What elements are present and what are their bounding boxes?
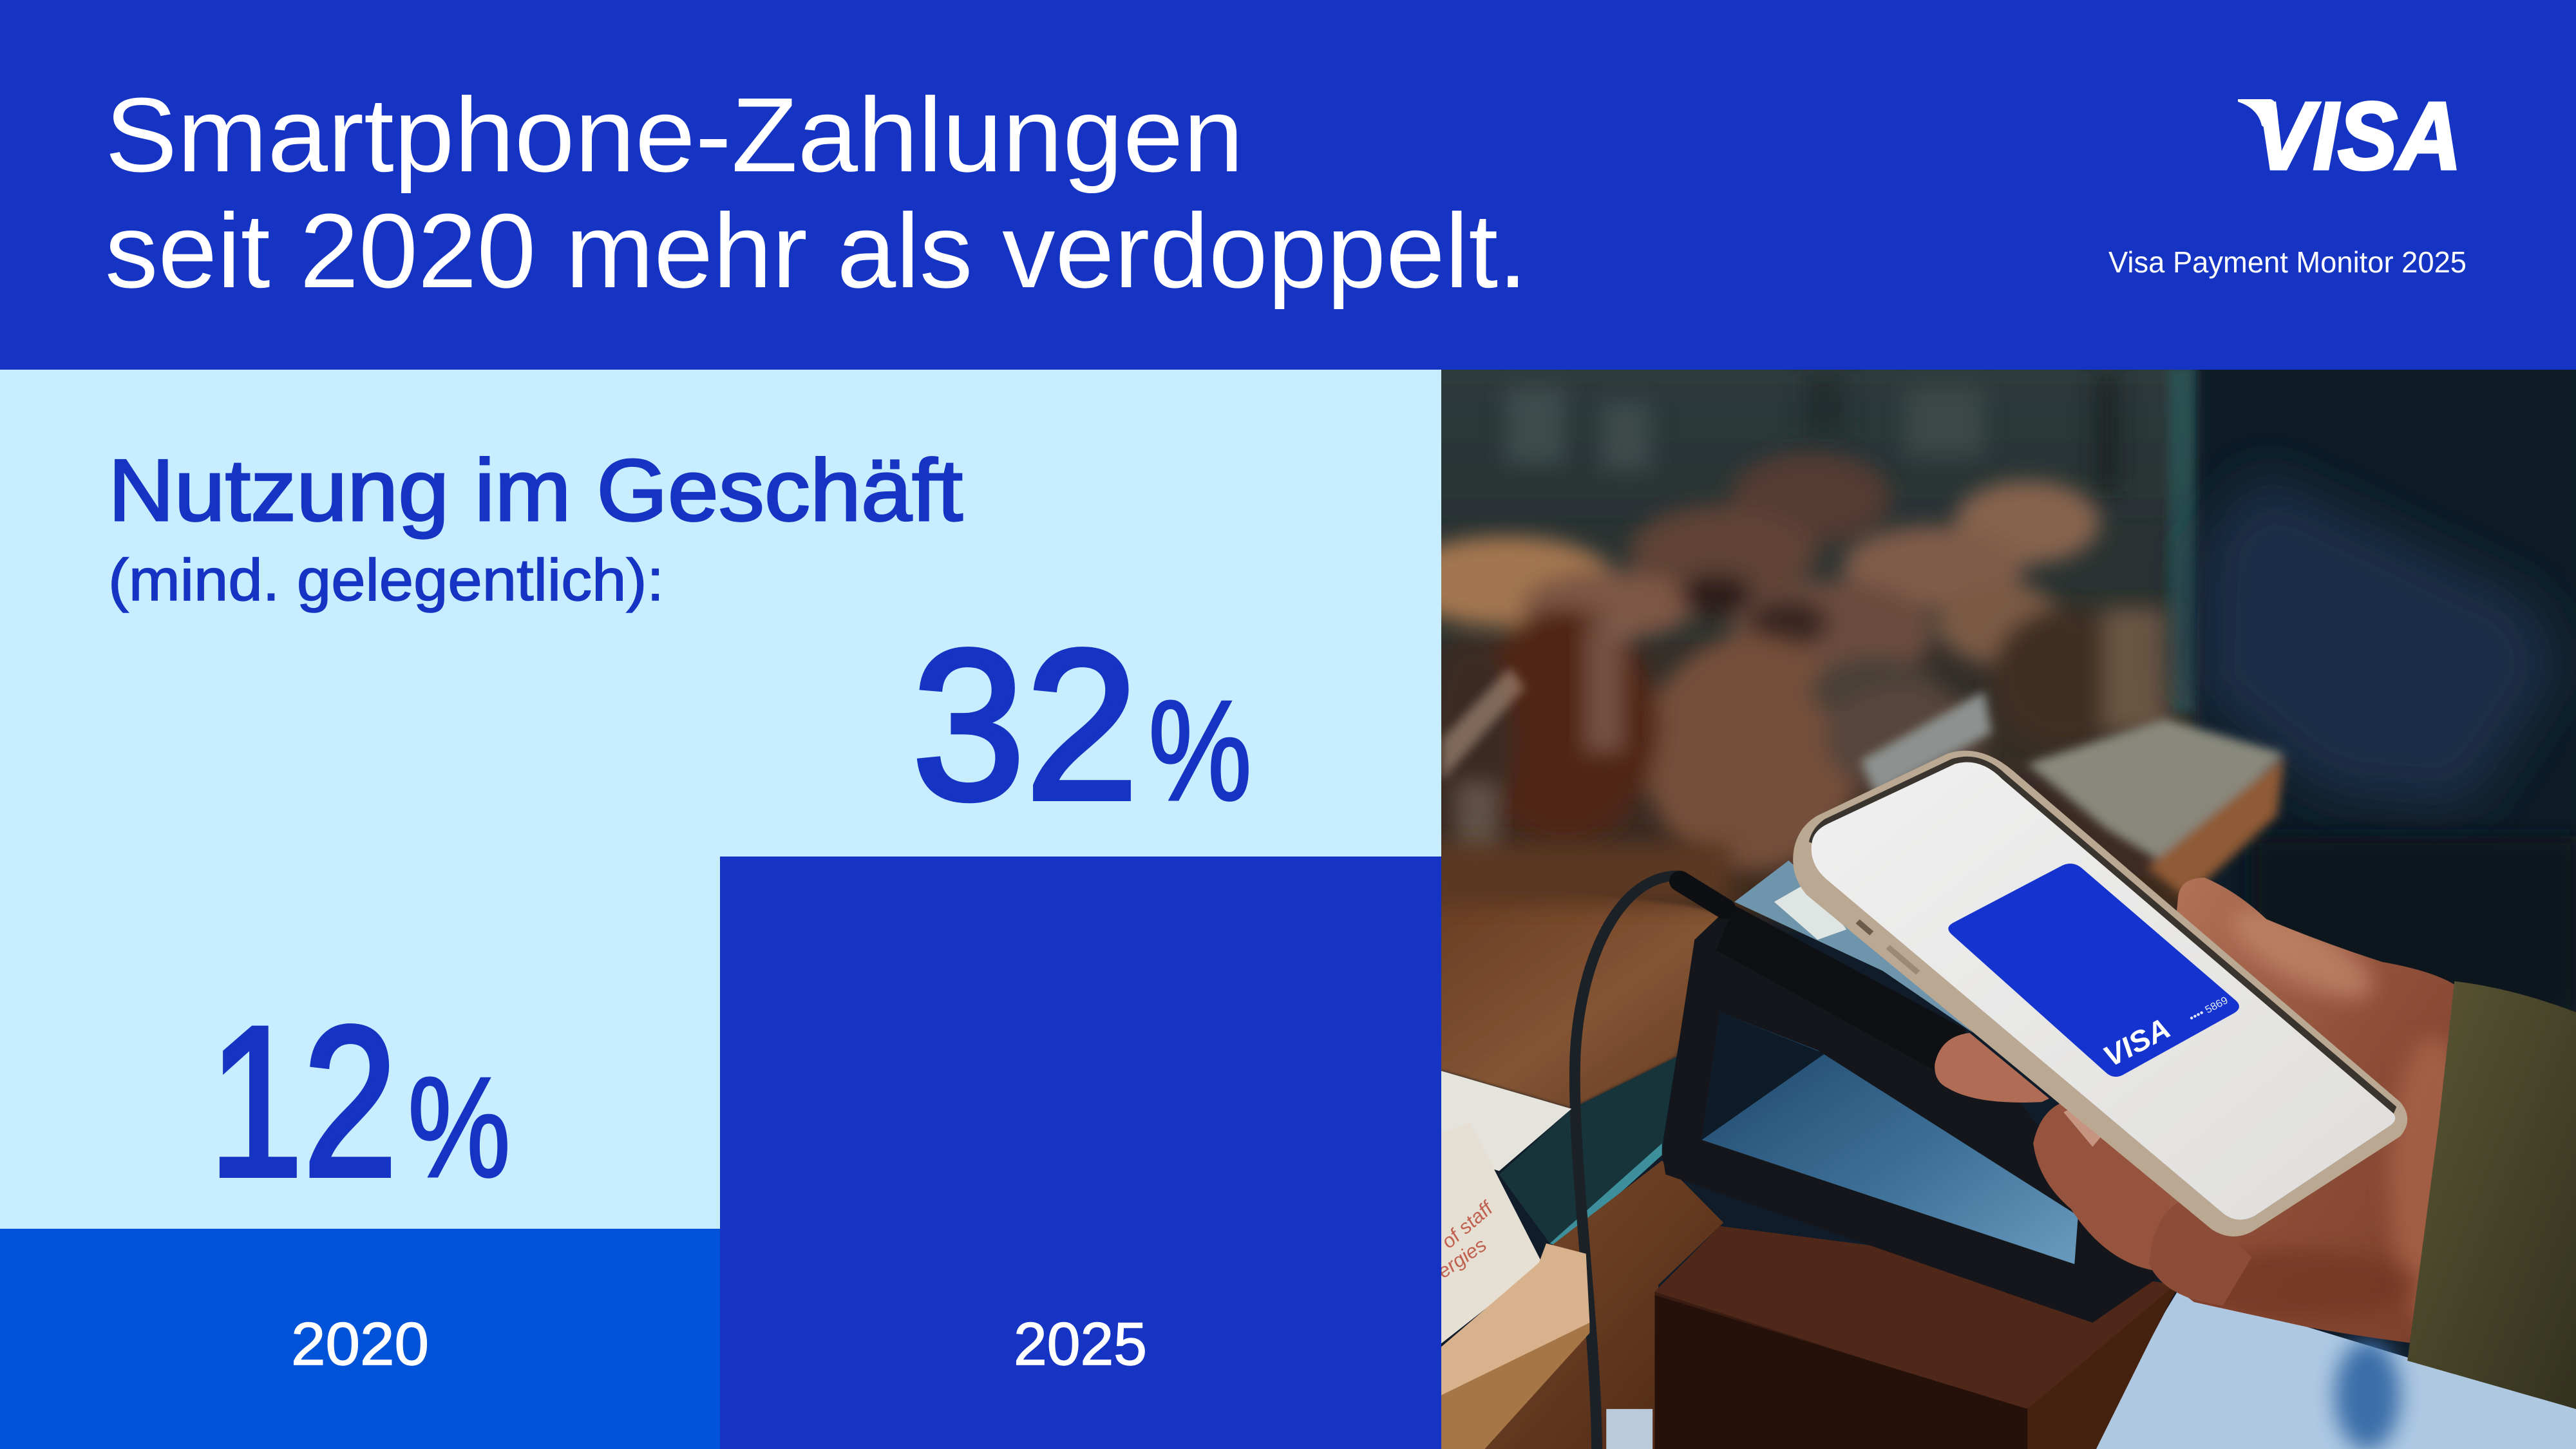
menu card: [1428, 1071, 1571, 1343]
heading: usage in store: Nutzung im Geschäft: [108, 441, 963, 539]
title: seit 2020 mehr als verdoppelt.: [105, 192, 1528, 310]
bar label 2025: 2025: [1014, 1310, 1147, 1378]
blurred bakery display behind the glass: [1398, 354, 2208, 919]
dark wooden box: [1654, 1226, 2179, 1449]
payment terminal: [1662, 860, 2157, 1323]
light floor areas: [1606, 1288, 2576, 1449]
photo: paying with a smartphone at a bakery terminal: [1428, 370, 2576, 1449]
jacket sleeve: [2407, 981, 2576, 1409]
bar: 2020: [0, 1229, 720, 1449]
terminal cable: [1575, 876, 1725, 1449]
wooden card holder: [1441, 1244, 1589, 1449]
hand holding the phone: [1935, 878, 2476, 1343]
digital Visa card on screen: VISA: [2098, 1012, 2176, 1073]
header band: [0, 0, 2576, 370]
value: 32 percent: %: [1148, 671, 1252, 831]
panel: light chart background: [0, 370, 1443, 1449]
value: 32 percent: [912, 605, 1252, 844]
source label: Visa Payment Monitor 2025: [2108, 245, 2467, 279]
menu card: lergies: [1429, 1234, 1491, 1285]
title: [105, 76, 1528, 310]
heading: usage in store: [108, 441, 963, 613]
digital Visa card on screen: [1948, 864, 2239, 1077]
title: Smartphone-Zahlungen: [105, 76, 1244, 194]
shelf on the right: [2027, 719, 2284, 898]
wooden counter: [1427, 843, 1745, 1449]
smartphone: [1793, 751, 2407, 1236]
value: 12 percent: 12: [209, 982, 397, 1221]
dark right background: [2194, 354, 2576, 1016]
value: 32 percent: 32: [912, 605, 1139, 844]
heading: usage in store: (mind. gelegentlich):: [108, 547, 664, 613]
value: 12 percent: %: [408, 1048, 511, 1208]
bar label 2020: 2020: [291, 1310, 429, 1378]
digital Visa card on screen: •••• 5869: [2187, 994, 2230, 1024]
Visa logo: VISA: [2254, 83, 2461, 189]
menu card: r of staff: [1428, 1196, 1499, 1260]
bar: 2025: [720, 857, 1441, 1449]
